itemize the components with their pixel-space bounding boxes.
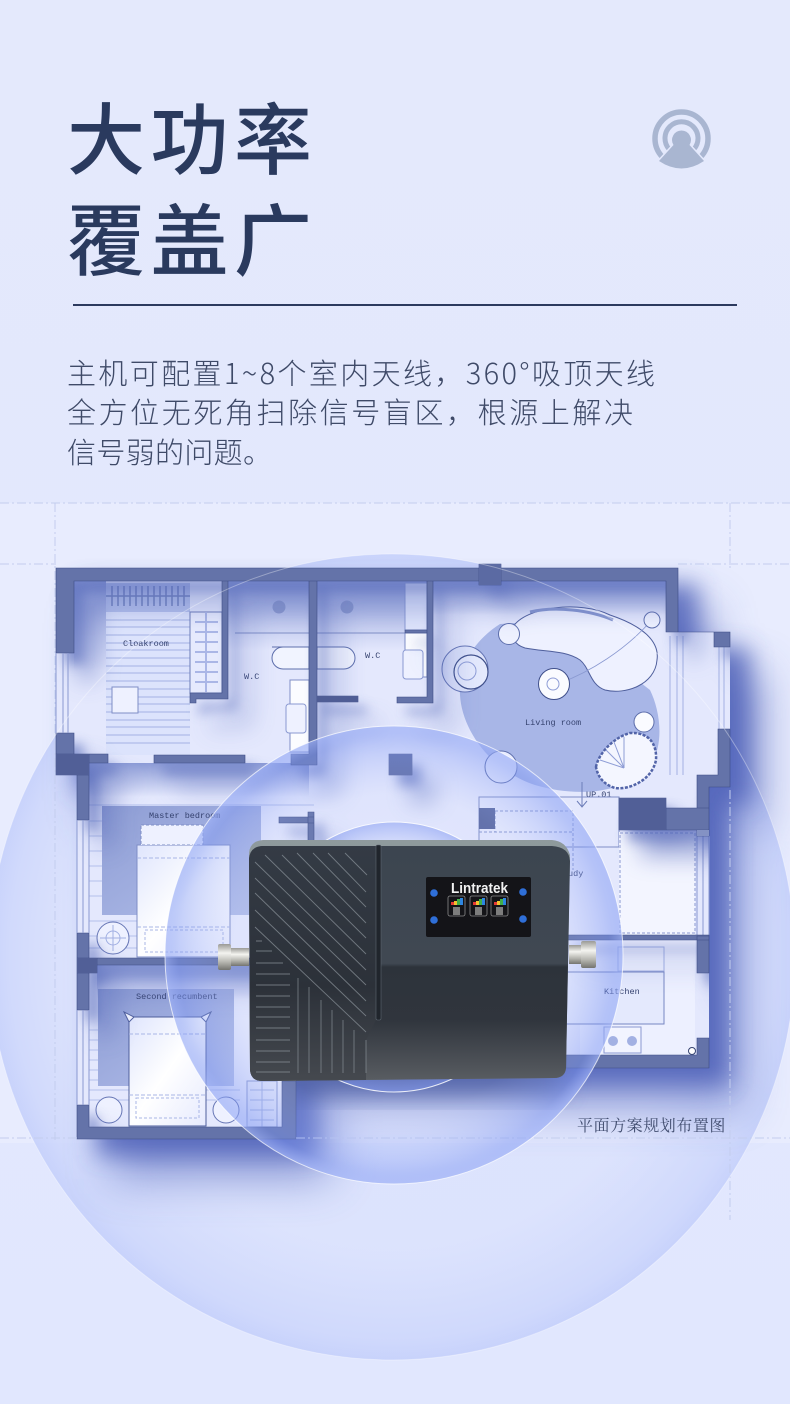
small coverage circle [259, 822, 529, 1092]
divider [73, 304, 737, 306]
floor plan [56, 564, 764, 1179]
kitchen: Kitchen [604, 987, 640, 997]
title: 覆盖广 [67, 180, 318, 292]
description text [67, 351, 655, 472]
title: 大功率 [67, 79, 318, 191]
master bedroom [89, 805, 314, 957]
display panel [426, 877, 531, 937]
window frames [56, 653, 89, 1105]
living room: Living room [525, 718, 581, 728]
cloakroom floor: Cloakroom [123, 639, 169, 649]
cloakroom floor [106, 583, 222, 755]
description text: 主机可配置1~8个室内天线，360°吸顶天线 [67, 351, 655, 393]
walls [56, 564, 730, 1139]
description text: 信号弱的问题。 [67, 430, 272, 472]
exterior wall shadows [76, 584, 764, 1179]
connector: right [569, 941, 596, 968]
bathrooms [235, 583, 427, 752]
study [479, 797, 619, 879]
kitchen [566, 940, 696, 1056]
signal booster device [218, 840, 596, 1081]
signal screens [448, 896, 508, 916]
second bedroom [89, 989, 277, 1127]
living room: UP.01 [586, 790, 612, 800]
brand logo: Lintratek [451, 880, 509, 897]
bathrooms: W.C [244, 672, 259, 682]
buttons [430, 888, 527, 924]
bathrooms: W.C [365, 651, 380, 661]
master bedroom: Master bedroom [149, 811, 220, 821]
interior wall shadows [65, 575, 752, 1165]
dashed guide lines [0, 503, 790, 1220]
connector: left [218, 944, 249, 970]
icon: signal broadcast [655, 112, 708, 168]
second bedroom: Second recumbent [136, 992, 218, 1002]
description text: 全方位无死角扫除信号盲区，根源上解决 [67, 390, 633, 432]
big circle rim [0, 554, 790, 1360]
side groove [376, 845, 381, 1020]
side room and window [619, 636, 724, 935]
device body [249, 840, 570, 1081]
living room [442, 607, 660, 807]
study: udy [568, 869, 583, 879]
caption: 平面方案规划布置图 [577, 1117, 726, 1135]
big coverage circle [0, 554, 790, 1360]
ribbed pattern [255, 853, 367, 1073]
blueprint section background [0, 503, 790, 1143]
medium coverage circle [165, 726, 623, 1184]
title [67, 79, 318, 292]
device cast shadow [285, 1055, 565, 1097]
house floor [56, 568, 730, 1139]
room shading bands [74, 581, 666, 999]
